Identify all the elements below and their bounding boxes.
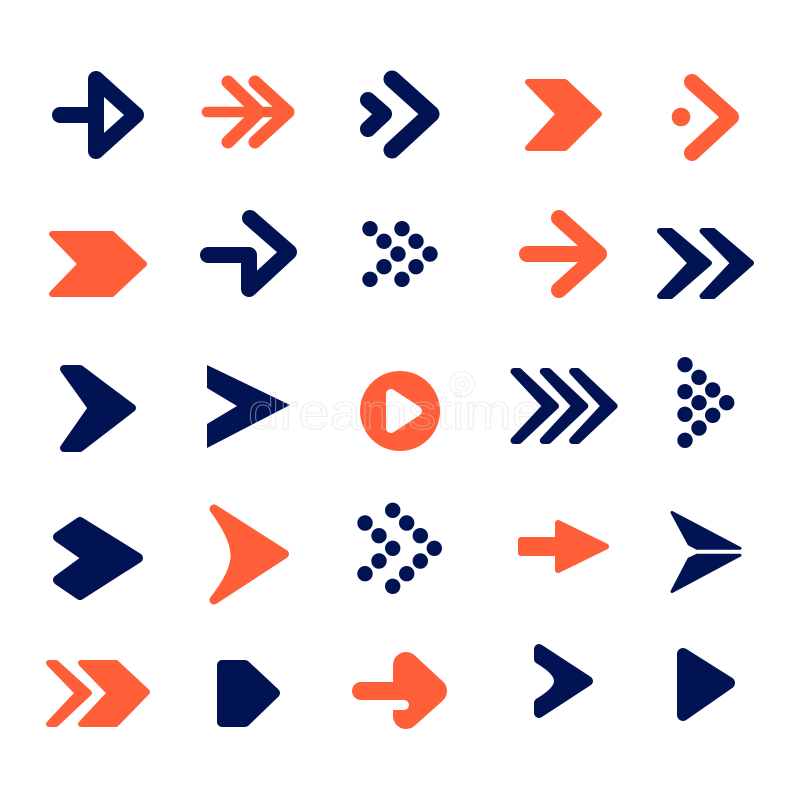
icon: bent stem arrow — [208, 218, 289, 289]
watermark: dreamstime — [248, 384, 543, 440]
icon: play button — [360, 371, 440, 451]
icon: double chevron arrow with stem — [207, 82, 288, 142]
icon: line arrow — [527, 218, 599, 290]
icon: curved orange arrowhead — [214, 509, 284, 600]
icon: block arrow — [521, 523, 606, 570]
icon: double navy chevrons — [660, 231, 751, 296]
icon: wide navy arrowhead — [58, 522, 138, 595]
icon: paper plane arrow — [672, 512, 740, 592]
icon: sharp navy arrowhead — [207, 365, 290, 448]
icon: solid orange chevron — [528, 82, 599, 148]
icon: wide orange chevron banner — [52, 234, 144, 294]
icon: line arrow with hollow triangle head — [60, 79, 136, 151]
icon: small and large chevrons — [368, 79, 431, 150]
icon: chevron with dot — [672, 82, 731, 153]
icon: triple chevrons — [514, 372, 614, 440]
icon: navy home plate arrow — [222, 665, 275, 722]
icon: dotted triangle arrow — [677, 357, 734, 448]
icon: rounded navy chevron — [64, 369, 132, 448]
icon: dotted arrow — [362, 221, 438, 287]
icon: fat head orange arrow — [361, 665, 434, 716]
icon: double orange chevrons small and large — [49, 663, 147, 724]
icon: notched navy arrowhead — [539, 649, 588, 713]
icon: dotted diamond arrow — [357, 503, 442, 594]
icon: navy triangle — [683, 654, 729, 715]
